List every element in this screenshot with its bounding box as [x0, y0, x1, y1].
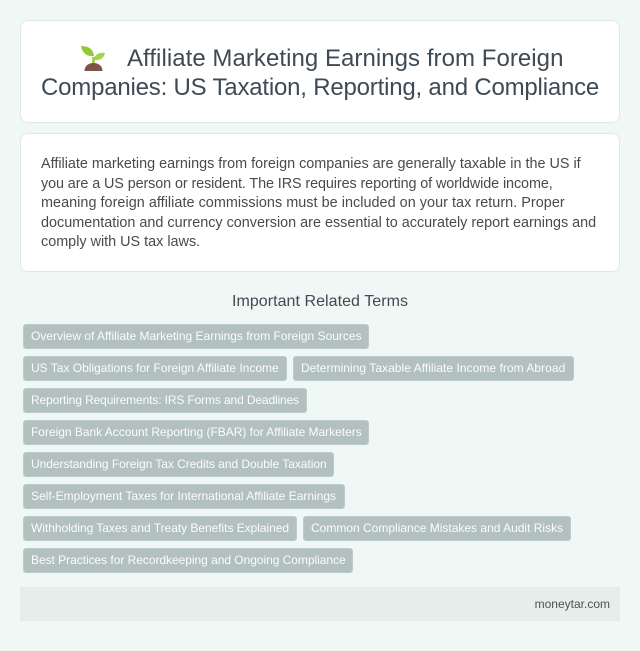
tag [23, 452, 334, 477]
footer bar [20, 587, 620, 621]
tag: Withholding Taxes and Treaty Benefits Explained [31, 521, 289, 535]
tag [303, 516, 571, 541]
tag: Self-Employment Taxes for International Affiliate Earnings [31, 489, 336, 503]
tag: Reporting Requirements: IRS Forms and Deadlines [31, 393, 299, 407]
icon: seedling [81, 46, 105, 71]
tag [23, 324, 369, 349]
title: Companies: US Taxation, Reporting, and Compliance [41, 74, 599, 101]
tag [23, 484, 345, 509]
tag: Determining Taxable Affiliate Income from Abroad [301, 361, 565, 375]
intro card [20, 133, 620, 272]
intro paragraph [41, 156, 596, 250]
tag: US Tax Obligations for Foreign Affiliate Income [31, 361, 279, 375]
title card [20, 20, 620, 123]
intro paragraph: comply with US tax laws. [41, 234, 200, 250]
intro paragraph: meaning foreign affiliate commissions must be included on your tax return. Proper [41, 195, 565, 211]
tag: Best Practices for Recordkeeping and Ongoing Compliance [31, 553, 346, 567]
tag: Overview of Affiliate Marketing Earnings from Foreign Sources [31, 329, 362, 343]
tag [293, 356, 574, 381]
tag list [23, 324, 574, 573]
related terms heading: Important Related Terms [232, 293, 408, 310]
tag [23, 420, 369, 445]
title [41, 45, 599, 101]
title: Affiliate Marketing Earnings from Foreign [127, 45, 563, 72]
intro paragraph: Affiliate marketing earnings from foreign companies are generally taxable in the US if [41, 156, 581, 172]
tag [23, 516, 297, 541]
intro paragraph: documentation and currency conversion are essential to accurately report earnings and [41, 214, 596, 230]
tag [23, 548, 353, 573]
footer text: moneytar.com [535, 597, 610, 611]
tag [23, 388, 307, 413]
intro paragraph: you are a US person or resident. The IRS requires reporting of worldwide income, [41, 176, 553, 192]
tag: Common Compliance Mistakes and Audit Risks [311, 521, 563, 535]
tag: Understanding Foreign Tax Credits and Double Taxation [31, 457, 327, 471]
tag [23, 356, 287, 381]
tag: Foreign Bank Account Reporting (FBAR) for Affiliate Marketers [31, 425, 362, 439]
